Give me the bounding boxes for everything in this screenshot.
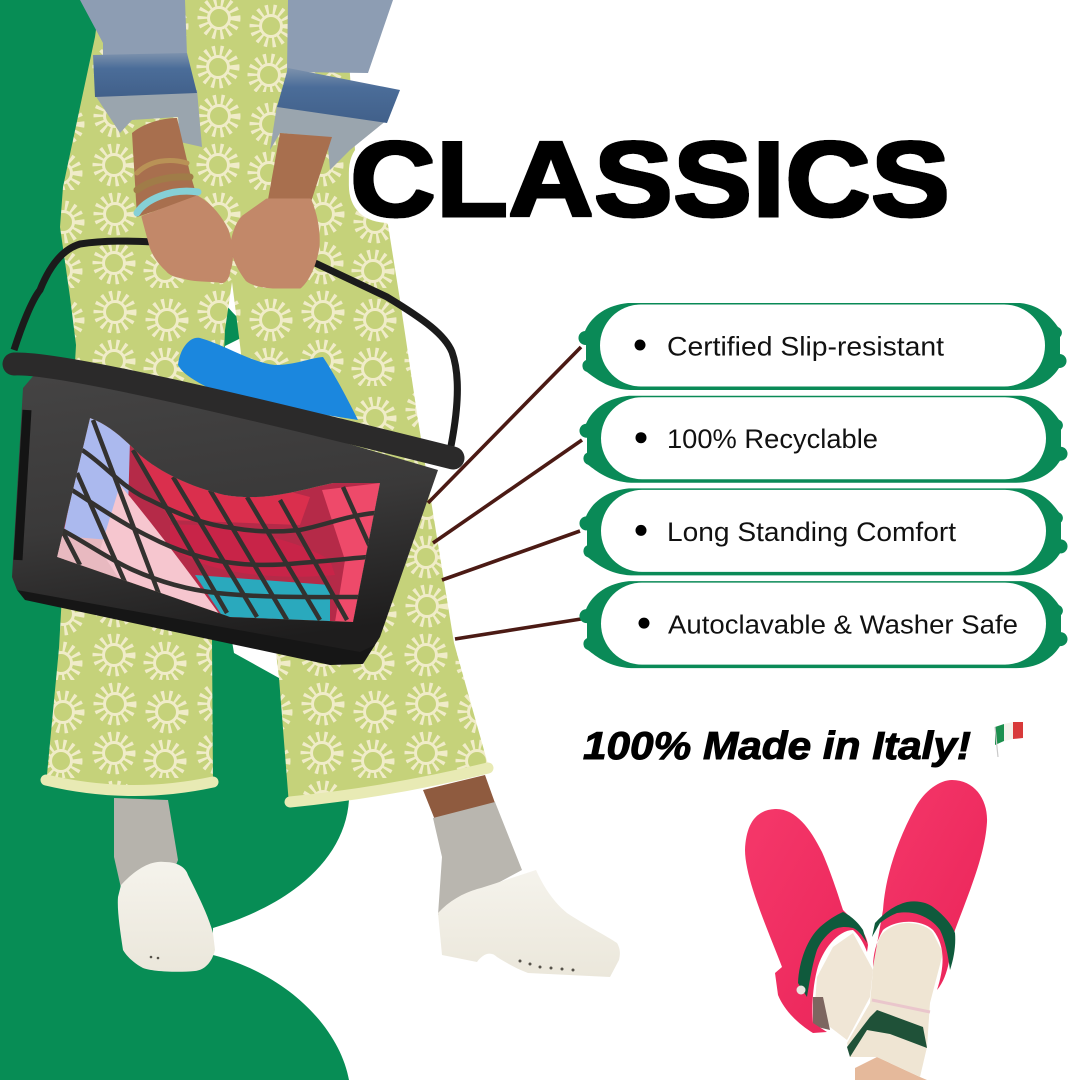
basket base [17, 590, 375, 665]
right sleeve [287, 0, 393, 73]
pill: certified slip-resistant: Certified Slip-resistant [667, 332, 945, 362]
left clog rivet [796, 986, 806, 994]
side grille [18, 410, 27, 560]
pink clog right [322, 483, 380, 622]
pill: autoclavable and washer safe: Autoclavable & Washer Safe [668, 612, 1018, 640]
right clog strap [872, 901, 955, 970]
left red clog [745, 809, 868, 1033]
right leg sock [847, 923, 943, 1077]
left white clog [118, 862, 215, 972]
red clog tread [133, 450, 310, 525]
light pink clog [100, 485, 222, 618]
pill: 100% recyclable [579, 396, 1068, 483]
bracelets [137, 160, 198, 213]
right cuff [277, 68, 400, 123]
basket body [12, 368, 438, 664]
hands gripping handle [143, 197, 318, 287]
window mesh [62, 420, 375, 620]
right white clog [438, 870, 620, 977]
right forearm [267, 133, 332, 205]
left cuff lining [95, 90, 202, 147]
shoes seen through basket window [57, 418, 380, 622]
blue clog in basket [178, 338, 358, 420]
sock pink stripe [872, 1000, 930, 1012]
denim jacket [80, 0, 400, 217]
right cuff lining [270, 105, 387, 170]
photo: red clogs with socks [745, 780, 987, 1080]
dark red clog [170, 525, 335, 577]
laundry basket [12, 364, 453, 665]
frayed hem right [290, 768, 488, 802]
clog vent holes [150, 956, 574, 972]
left sleeve [80, 0, 187, 55]
pill: certified slip-resistant [578, 303, 1067, 390]
right ankle skin [423, 775, 495, 820]
teal clog [195, 575, 330, 622]
sock green stripe [847, 1010, 927, 1057]
right sock [433, 802, 522, 915]
left hand [143, 197, 231, 282]
left leg sock [815, 933, 873, 1040]
basket handle [14, 241, 457, 446]
left sock heel patch [813, 997, 830, 1030]
right hand [232, 200, 318, 287]
dark lower corner [57, 536, 122, 580]
basket rim [14, 364, 453, 458]
made in italy tagline: 100% Made in Italy! [583, 725, 971, 768]
ankle skin [855, 1057, 927, 1080]
right red clog [873, 780, 987, 990]
left cuff [93, 53, 197, 97]
pill: long standing comfort [579, 488, 1068, 575]
frayed hem left [46, 780, 213, 791]
icon: italian flag [995, 722, 1023, 757]
left forearm [132, 118, 197, 217]
left clog strap [798, 912, 867, 997]
lavender clog [62, 415, 130, 540]
model figure [46, 0, 620, 977]
pill: long standing comfort: Long Standing Comfort [667, 517, 957, 547]
left sock [114, 798, 178, 888]
pill: 100% recyclable: 100% Recyclable [667, 424, 878, 454]
green curved background shape [0, 0, 349, 1080]
pill: autoclavable and washer safe [579, 581, 1068, 668]
patterned trousers [46, 0, 489, 805]
connector lines [428, 347, 582, 639]
title: CLASSICS [350, 119, 950, 239]
